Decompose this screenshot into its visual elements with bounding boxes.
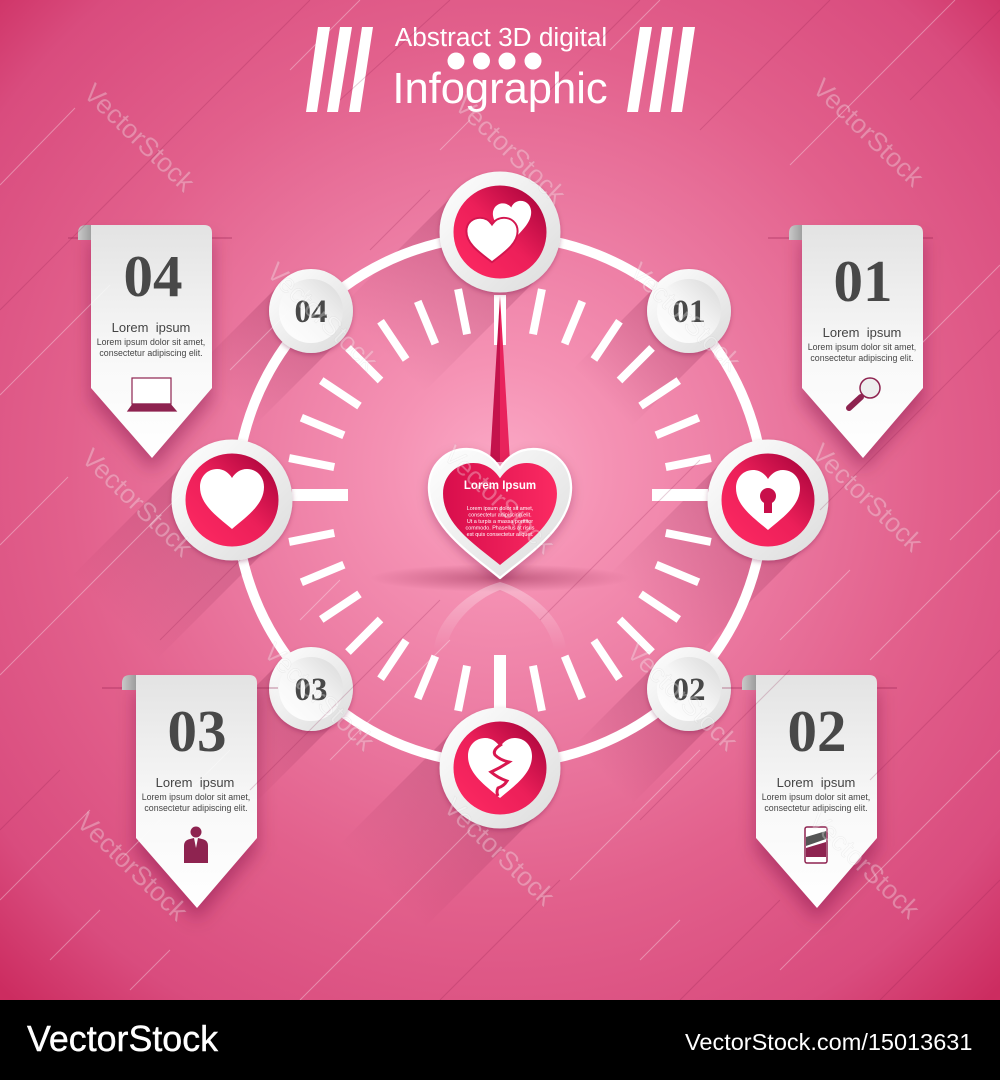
title dots [448,52,542,70]
dial ring [236,236,764,764]
panel: banner 01 [768,225,933,470]
description [808,342,916,363]
watermarks: VectorStock [438,792,561,912]
small node 01 [647,269,731,353]
heart body text: Lorem ipsum dolor sit amet, [467,506,534,512]
watermarks: VectorStock [76,443,199,563]
description: Lorem ipsum dolor sit amet, [808,342,916,352]
node: bottom broken heart [440,708,560,828]
small node 02: 02 [672,672,706,708]
watermarks: VectorStock [438,440,561,560]
icon: person [184,826,208,863]
watermarks [71,73,930,927]
icon: magnifier [849,378,880,408]
heart body text: est quis consectetur aliquet. [467,532,533,538]
footer brand: VectorStock [27,1019,218,1059]
icon: laptop [128,378,176,411]
small node 03: 03 [294,672,328,708]
description: consectetur adipiscing elit. [810,353,914,363]
watermarks: VectorStock [449,90,572,210]
watermarks: VectorStock [806,438,929,558]
number: 01 [834,248,892,314]
dial tick marks [288,288,712,712]
watermarks: VectorStock [261,257,384,377]
heart body text [466,506,535,538]
number: 03 [168,698,226,764]
title main line: Infographic [392,65,608,113]
right stripes [627,27,695,112]
description: Lorem ipsum dolor sit amet, [762,792,870,802]
node: top hearts [440,172,560,292]
small node 04 [269,269,353,353]
icon: keyhole heart [736,470,800,530]
small node 04: 04 [294,294,328,330]
heart body text: Ut a turpis a massa porttitor [467,519,533,525]
needle [490,296,510,462]
long shadows [68,190,810,932]
number: 02 [788,698,846,764]
small node 01: 01 [672,294,706,330]
description [97,337,205,358]
title block [306,22,695,113]
node: left heart [172,440,292,560]
heart heading: Lorem Ipsum [464,480,536,492]
panel: banner 02 [722,675,897,920]
node: right keyhole heart [708,440,828,560]
heart white frame [429,449,571,578]
icon: phone [805,827,827,863]
description: consectetur adipiscing elit. [144,803,248,813]
heart body text: commodo. Phasellus at risus [466,526,535,532]
icon: heart [200,469,264,529]
heading: Lorem ipsum [156,775,234,790]
watermarks: VectorStock [71,807,194,927]
panel: banner 04 [68,225,232,470]
small node 03 [269,647,353,731]
footer bar [0,1000,1000,1080]
heart red fill [443,463,557,565]
heading: Lorem ipsum [777,775,855,790]
number: 04 [124,243,182,309]
description: Lorem ipsum dolor sit amet, [142,792,250,802]
description: consectetur adipiscing elit. [99,348,203,358]
watermarks: VectorStock [78,78,201,198]
center heart [429,449,571,578]
heart body text: consectetur adipiscing elit. [468,512,532,518]
title top line: Abstract 3D digital [395,22,607,52]
watermarks: VectorStock [624,257,747,377]
heading: Lorem ipsum [112,320,190,335]
description [142,792,250,813]
left stripes [306,27,373,112]
icon: two hearts [466,200,535,262]
watermarks: VectorStock [258,637,381,757]
panel: banner 03 [102,675,278,920]
description [762,792,870,813]
description: Lorem ipsum dolor sit amet, [97,337,205,347]
icon: broken heart [468,738,532,798]
footer url: VectorStock.com/15013631 [685,1029,972,1055]
description: consectetur adipiscing elit. [764,803,868,813]
small node 02 [647,647,731,731]
watermarks: VectorStock [803,805,926,925]
floor shadow and heart reflection [370,564,630,650]
watermarks: VectorStock [621,637,744,757]
heading: Lorem ipsum [823,325,901,340]
watermarks: VectorStock [807,73,930,193]
